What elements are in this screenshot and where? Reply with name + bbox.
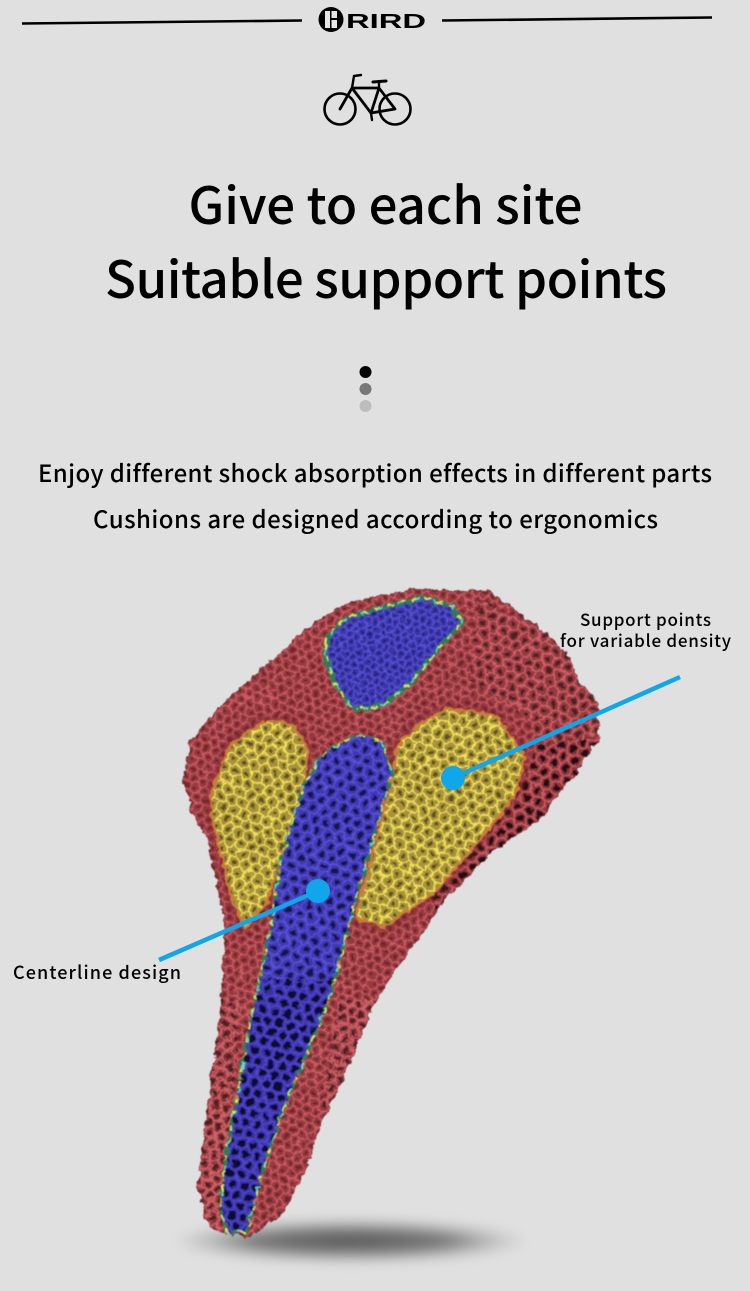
header: logo with divider lines	[22, 7, 712, 33]
saddle top blue zone	[325, 597, 463, 708]
three dots indicator	[360, 366, 372, 412]
callout: support points: Support points	[580, 606, 711, 631]
callout: centerline design	[13, 879, 330, 985]
saddle right yellow zone	[355, 708, 525, 927]
saddle left yellow zone	[211, 721, 308, 928]
saddle ground shadow	[172, 1219, 528, 1263]
subtitle text	[38, 454, 712, 535]
subtitle text: Enjoy different shock absorption effects in different parts	[38, 454, 712, 489]
callout: centerline design: Centerline design	[13, 959, 181, 985]
callout: support points: for variable density	[560, 627, 732, 652]
title: Suitable support points	[105, 239, 667, 313]
saddle mesh illustration	[183, 589, 610, 1240]
subtitle text: Cushions are designed according to ergonomics	[93, 500, 658, 535]
title	[105, 165, 667, 313]
title: Give to each site	[188, 165, 582, 239]
dark halos around the yellow zones	[211, 708, 525, 928]
callout: support points	[441, 606, 732, 790]
icon: bicycle	[324, 75, 410, 124]
saddle center blue zone	[220, 737, 392, 1232]
saddle red outer zone	[183, 589, 610, 1240]
header: logo with divider lines: RIRD	[346, 10, 426, 33]
